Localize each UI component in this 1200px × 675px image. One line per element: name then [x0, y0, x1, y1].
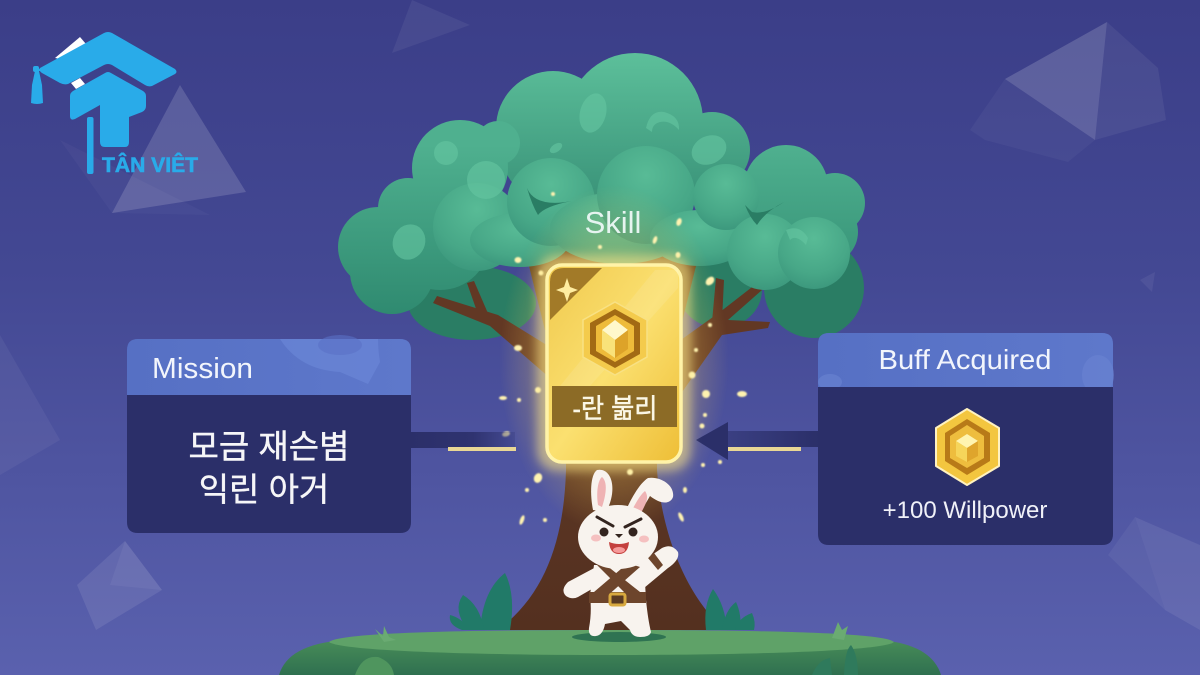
- canopy front blobs: [433, 146, 850, 290]
- ground leaves: [355, 657, 394, 675]
- buff body: +100 Willpower: [883, 497, 1047, 524]
- ground island: [279, 622, 941, 675]
- rabbit body: [589, 565, 651, 637]
- rabbit character: [563, 470, 678, 642]
- card label band: -란 붊리: [572, 394, 658, 424]
- canopy back foliage: [408, 238, 864, 340]
- mission header: Mission: [152, 353, 253, 385]
- icon: gold hexagon gem: [936, 409, 999, 485]
- logo: Tân Việt: [31, 32, 198, 177]
- rabbit head: [578, 505, 658, 569]
- canopy leaf marks: [527, 188, 784, 225]
- logo: stem: [87, 117, 94, 174]
- rabbit ears: [591, 470, 673, 517]
- skill label: Skill: [585, 205, 641, 240]
- card corner: [550, 268, 602, 320]
- skill card: [537, 255, 691, 471]
- ground top plane: [329, 630, 894, 655]
- tree trunk and branches: [433, 250, 770, 630]
- rabbit face: [591, 517, 649, 554]
- grass bushes: [450, 573, 755, 630]
- buff header: [818, 333, 1114, 395]
- buff header: Buff Acquired: [878, 344, 1052, 375]
- logo: wordmark: TÂN VIÊT: [102, 153, 198, 177]
- logo: graduation cap: [31, 32, 176, 104]
- canopy top mass: [496, 53, 750, 215]
- buff body: [818, 387, 1113, 545]
- tree: [338, 53, 865, 630]
- panel: mission: [127, 335, 411, 533]
- icon: card hexagon gem: [583, 302, 647, 375]
- card glow: [499, 185, 729, 535]
- card label band: [552, 386, 677, 427]
- logo: arrow: [70, 72, 146, 147]
- rabbit shadow: [572, 632, 666, 642]
- mission body: [127, 395, 411, 533]
- canopy highlights: [387, 90, 808, 265]
- rabbit arms: [563, 566, 604, 598]
- tree canopy: [338, 53, 865, 314]
- left connector: [410, 432, 516, 451]
- rabbit straps and buckle: [589, 563, 646, 605]
- mission body: 모금 재슨볌: [189, 428, 349, 465]
- sparkles: [499, 192, 747, 525]
- ground side: [279, 640, 941, 675]
- mission header: [127, 335, 411, 396]
- mission body: 익린 아거: [199, 471, 329, 508]
- panel: buff acquired: [818, 333, 1114, 545]
- grass tufts: [375, 622, 848, 642]
- canopy side masses: [338, 120, 865, 314]
- right connector arrow: [696, 422, 819, 460]
